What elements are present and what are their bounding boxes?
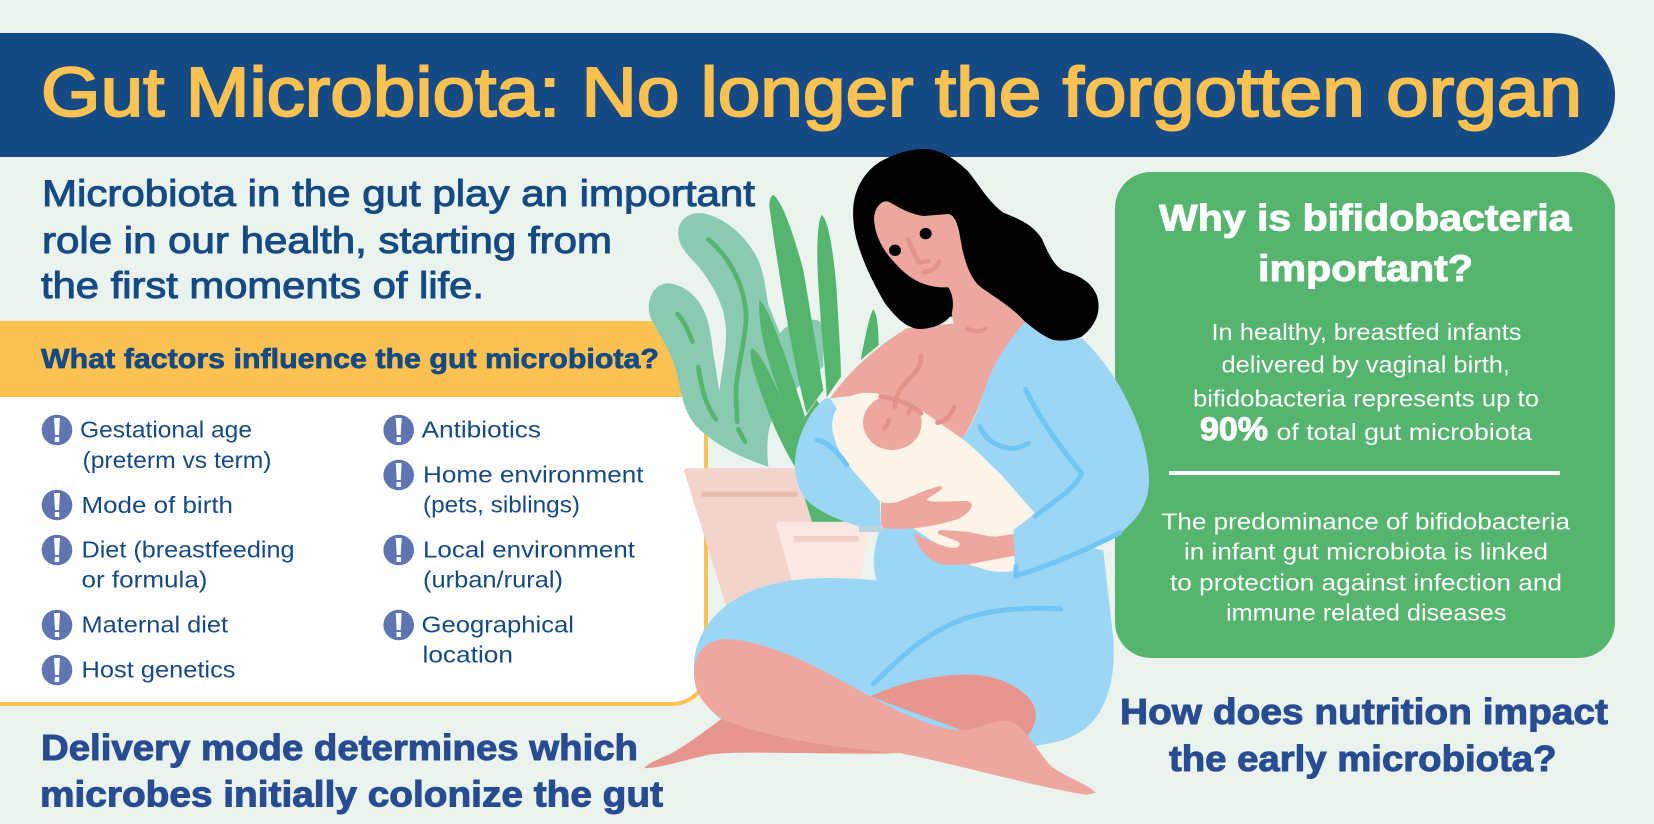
factor: maternal diet (42, 610, 229, 640)
factor: home environment: (pets, siblings) (423, 492, 580, 518)
delivery mode heading (40, 727, 663, 814)
factor: antibiotics: Antibiotics (422, 416, 541, 442)
icon: mother upper body and baby (795, 149, 1149, 577)
icon: dress body (694, 528, 1114, 746)
factor: antibiotics (383, 415, 541, 445)
illustration: mother breastfeeding with plants (644, 149, 1149, 795)
factor: host genetics (42, 655, 236, 685)
icon: crossed legs (644, 639, 1096, 795)
factor: geographical location: location (422, 642, 513, 668)
factor: mode of birth: Mode of birth (82, 492, 233, 518)
delivery mode heading: Delivery mode determines which (41, 727, 638, 768)
title: Gut Microbiota: No longer the forgotten organ (41, 53, 1582, 131)
factor: home environment: Home environment (423, 462, 644, 488)
panel: factors influencing the gut microbiota (0, 321, 706, 704)
icon: large pot (684, 468, 812, 608)
icon: plant (649, 195, 879, 522)
panel heading (1159, 196, 1573, 289)
factor: host genetics: Host genetics (82, 656, 236, 682)
factor: diet: Diet (breastfeeding (82, 536, 294, 562)
panel heading: Why is bifidobacteria (1159, 196, 1573, 238)
factor: diet: or formula) (82, 566, 208, 592)
panel heading: important? (1258, 247, 1473, 289)
intro text: Microbiota in the gut play an important (42, 172, 756, 214)
breastfed infants text: of total gut microbiota (1276, 419, 1533, 445)
nutrition heading (1120, 691, 1608, 779)
predominance text: to protection against infection and (1170, 570, 1562, 596)
nutrition heading: How does nutrition impact (1120, 691, 1608, 732)
icon: small pot (776, 522, 872, 584)
factor: local environment: Local environment (423, 536, 636, 562)
factor: mode of birth (42, 490, 233, 520)
intro text: the first moments of life. (41, 264, 484, 306)
factors heading: What factors influence the gut microbiota? (41, 343, 659, 374)
predominance text: The predominance of bifidobacteria (1162, 508, 1571, 534)
factor: gestational age (42, 415, 272, 473)
nutrition heading: the early microbiota? (1169, 738, 1556, 779)
breastfed infants text: 90% (1200, 411, 1268, 447)
predominance text: immune related diseases (1226, 600, 1506, 626)
breastfed infants text: delivered by vaginal birth, (1222, 352, 1510, 378)
factor: local environment: (urban/rural) (423, 566, 563, 592)
breastfed infants text (1193, 319, 1539, 447)
factor: maternal diet: Maternal diet (82, 612, 229, 638)
factor: home environment (383, 460, 644, 518)
factor: geographical location (383, 610, 574, 668)
factor: gestational age: Gestational age (80, 416, 252, 442)
factor: gestational age: (preterm vs term) (82, 447, 272, 473)
factor: diet (42, 535, 295, 592)
intro text: role in our health, starting from (42, 219, 612, 261)
factor: geographical location: Geographical (422, 612, 574, 638)
intro text (41, 172, 756, 306)
breastfed infants text: In healthy, breastfed infants (1212, 319, 1522, 345)
delivery mode heading: microbes initially colonize the gut (40, 774, 663, 814)
panel: why is bifidobacteria important (1115, 172, 1615, 658)
predominance text: in infant gut microbiota is linked (1184, 538, 1548, 564)
breastfed infants text: bifidobacteria represents up to (1193, 386, 1539, 412)
title banner (0, 33, 1615, 157)
factor: local environment (383, 535, 636, 592)
predominance text (1162, 508, 1571, 626)
